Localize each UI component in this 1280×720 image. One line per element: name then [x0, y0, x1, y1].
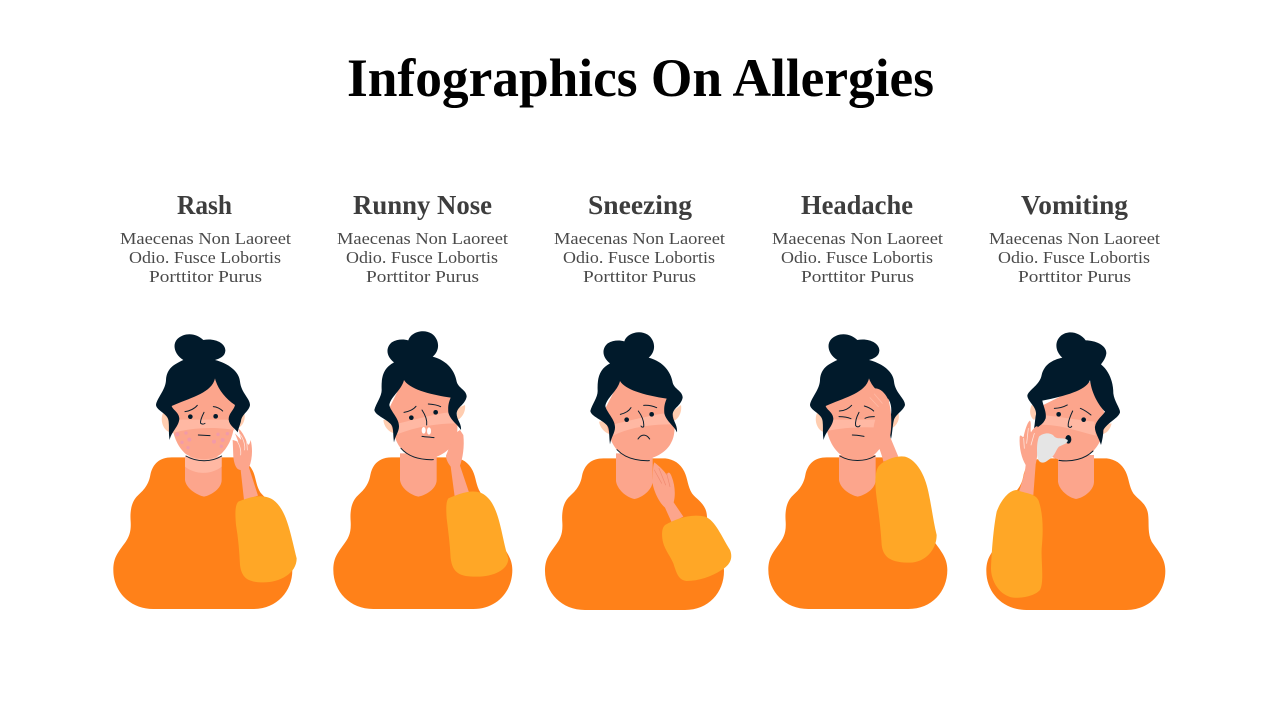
description: headache: Porttitor Purus [801, 267, 914, 286]
description: vomiting: Porttitor Purus [1018, 267, 1131, 286]
description: vomiting [989, 229, 1160, 286]
description: runny nose: Porttitor Purus [366, 267, 479, 286]
sleeve [446, 491, 508, 577]
description: headache: Odio. Fusce Lobortis [781, 248, 933, 267]
illustration: woman with runny nose [333, 331, 512, 609]
description: rash: Odio. Fusce Lobortis [129, 248, 281, 267]
panel: sneezing text [554, 190, 725, 286]
description: runny nose [337, 229, 508, 286]
description: runny nose: Odio. Fusce Lobortis [346, 248, 498, 267]
sleeve [875, 456, 937, 563]
arm and hand on cheek [446, 430, 469, 497]
panel: headache text [772, 190, 943, 286]
runny nose drops [422, 427, 431, 435]
hand on forehead [870, 388, 898, 462]
arm and hand on throat [652, 462, 683, 522]
description: vomiting: Odio. Fusce Lobortis [998, 248, 1150, 267]
description: vomiting: Maecenas Non Laoreet [989, 229, 1160, 248]
heading: rash: Rash [177, 190, 232, 220]
description: rash: Porttitor Purus [149, 267, 262, 286]
arm and scratching hand [233, 429, 258, 500]
description: sneezing [554, 229, 725, 286]
heading: runny nose: Runny Nose [353, 190, 492, 220]
illustration: woman vomiting [986, 332, 1165, 610]
illustration: woman sneezing [545, 332, 731, 610]
sleeve [235, 496, 297, 582]
panel: rash text [120, 190, 291, 286]
description: rash [120, 229, 291, 286]
description: sneezing: Porttitor Purus [583, 267, 696, 286]
description: headache: Maecenas Non Laoreet [772, 229, 943, 248]
description: runny nose: Maecenas Non Laoreet [337, 229, 508, 248]
open mouth [1065, 435, 1071, 444]
title: Infographics On Allergies [347, 48, 934, 108]
illustration: woman with headache [768, 334, 947, 609]
illustration: woman with rash [113, 334, 297, 609]
description: headache [772, 229, 943, 286]
heading: sneezing: Sneezing [588, 190, 692, 220]
heading: headache: Headache [801, 190, 913, 220]
sleeve [991, 490, 1043, 598]
description: rash: Maecenas Non Laoreet [120, 229, 291, 248]
sleeve [662, 516, 731, 581]
description: sneezing: Odio. Fusce Lobortis [563, 248, 715, 267]
tissue [1037, 433, 1068, 463]
heading: vomiting: Vomiting [1021, 190, 1128, 220]
panel: vomiting text [989, 190, 1160, 286]
panel: runny nose text [337, 190, 508, 286]
hand holding mouth [1019, 421, 1038, 495]
description: sneezing: Maecenas Non Laoreet [554, 229, 725, 248]
